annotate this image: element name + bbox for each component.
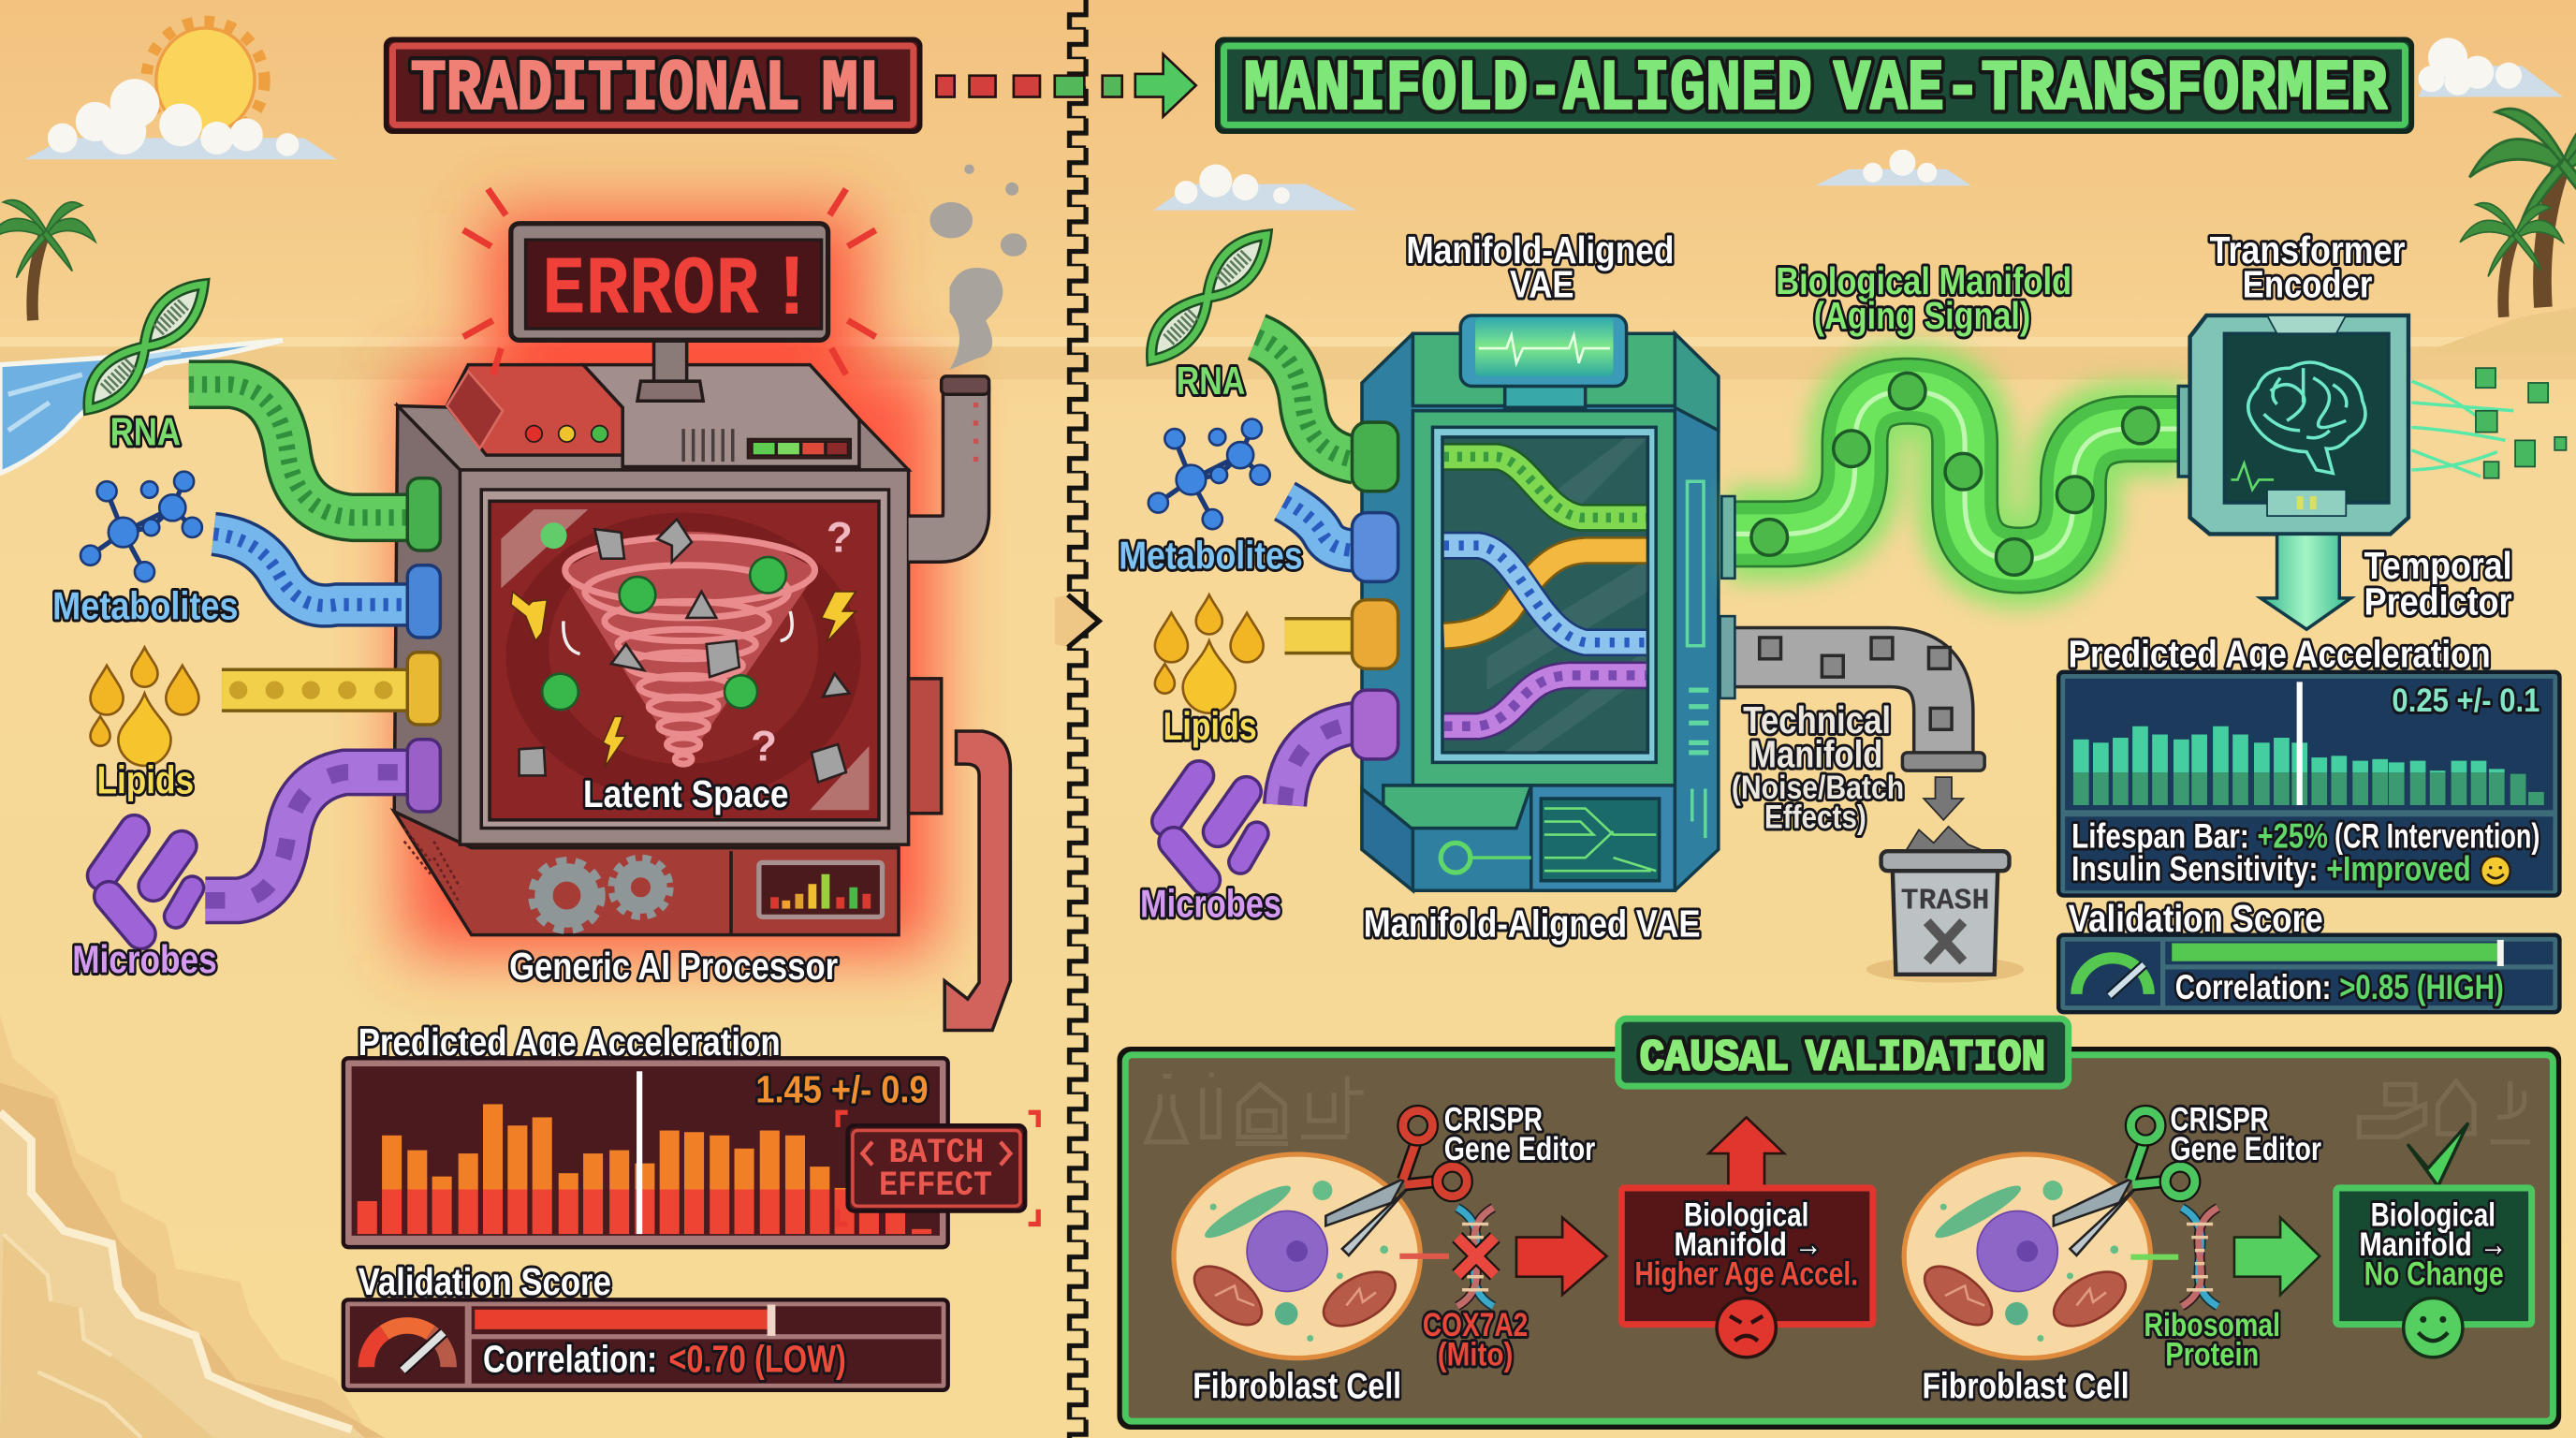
icon: ribosomal gene: [2130, 1208, 2217, 1306]
insulin line: Insulin Sensitivity:: [2071, 850, 2318, 888]
debris rocks: [520, 520, 849, 782]
label: lipids: Lipids: [1164, 704, 1257, 748]
cloud: [1153, 165, 1357, 211]
icon: brain: [2248, 362, 2365, 473]
side vents: [1687, 481, 1708, 838]
callout: batch effect: BATCH: [889, 1134, 984, 1173]
panel: right validation score: [2058, 935, 2559, 1012]
scissors red: [1325, 1110, 1467, 1255]
value: 1.45 +/- 0.9: [755, 1068, 929, 1111]
tube nodes: [1751, 373, 2159, 575]
icon: happy face: [2404, 1299, 2463, 1357]
icon: check: [2408, 1123, 2467, 1186]
top capsule: [1460, 315, 1627, 407]
divider: [1055, 0, 1099, 1438]
arrow: batch effect leak: [944, 731, 1010, 1030]
gears: [534, 859, 668, 929]
exhaust pipe: [909, 376, 989, 539]
label: transformer encoder: Encoder: [2243, 263, 2373, 306]
icon: metabolites: [80, 472, 202, 581]
faded lab icons right: [2359, 1081, 2530, 1142]
cloud: [2419, 37, 2563, 97]
palm tree: [2460, 203, 2563, 317]
label: biological manifold: [1776, 259, 2071, 337]
label: fibroblast left: Fibroblast Cell: [1193, 1367, 1401, 1407]
title: manifold-aligned VAE-transformer: VAE-TRANSFORMER: [1834, 50, 2388, 131]
icon: sun: [146, 22, 265, 139]
left cell: [1174, 1154, 1420, 1358]
title: manifold-aligned VAE-transformer: [1218, 39, 2411, 131]
bottom side vents: [404, 829, 460, 903]
label: microbes: Microbes: [1140, 881, 1281, 925]
label: CRISPR left: CRISPR: [1444, 1102, 1543, 1138]
icon: lipids: [91, 648, 198, 766]
bars: [2073, 726, 2544, 805]
water: [0, 340, 283, 473]
label: technical manifold: Effects): [1764, 800, 1866, 836]
box: no change: [2336, 1188, 2532, 1325]
pipe: microbes: [1284, 723, 1357, 805]
label: technical manifold: Manifold: [1749, 733, 1882, 776]
icon: microbes: [81, 809, 208, 955]
label: manifold-aligned VAE top: [1406, 228, 1674, 306]
red glow: [402, 213, 936, 953]
label: CRISPR right: [2170, 1102, 2321, 1167]
error sign: !: [778, 240, 806, 331]
label: metabolites: Metabolites: [1119, 533, 1303, 577]
label: biological manifold: (Aging Signal): [1814, 294, 2030, 337]
panel: manifold-aligned VAE machine: [1352, 315, 1719, 890]
arrow: to trash: [1924, 777, 1963, 820]
green orbs: [540, 522, 786, 710]
pipe: microbes: [205, 740, 440, 901]
pipe: metabolites: [213, 534, 440, 638]
gauge: [366, 1326, 448, 1371]
icon: angry face: [1717, 1299, 1776, 1357]
label: latent space: Latent Space: [583, 772, 788, 815]
box: no change: Manifold →: [2359, 1226, 2507, 1263]
callout: batch effect: EFFECT: [879, 1167, 992, 1206]
label: predicted age acceleration (left): Predicted Age Acceleration: [359, 1020, 781, 1064]
label: biological manifold: Biological Manifold: [1776, 259, 2071, 302]
icon: RNA: [89, 285, 204, 409]
label: generic AI processor: Generic AI Processor: [509, 945, 838, 988]
label: COX7A2: (Mito): [1438, 1336, 1513, 1372]
label: CRISPR right: CRISPR: [2170, 1102, 2269, 1138]
palm tree: [0, 200, 95, 320]
question marks: ?: [751, 723, 777, 770]
arrow: transition dashes: [936, 54, 1196, 117]
bars: [358, 1104, 931, 1234]
pipe: RNA: [1257, 337, 1355, 460]
title: traditional ML: TRADITIONAL: [411, 50, 800, 131]
panel: right validation score: >0.85 (HIGH): [2339, 968, 2504, 1006]
heading tab: [1618, 1019, 2069, 1086]
panel: transformer encoder: [2178, 315, 2408, 534]
data particles: [2411, 368, 2566, 478]
label: fibroblast right: Fibroblast Cell: [1922, 1367, 2130, 1407]
window: [1432, 427, 1656, 762]
ribbons: [1444, 457, 1647, 726]
pipe: RNA: [189, 385, 440, 550]
label: metabolites: Metabolites: [52, 584, 238, 628]
label: CRISPR left: [1444, 1102, 1595, 1167]
label: predicted age acceleration (right): Predicted Age Acceleration: [2069, 633, 2491, 676]
icon: trash can: [1866, 827, 2024, 983]
panel: right validation score: Correlation:: [2175, 968, 2331, 1006]
error sign: [511, 224, 828, 401]
gauge: [2076, 958, 2149, 996]
cloud: [1815, 150, 1971, 185]
pipe: lipids: [1284, 625, 1357, 647]
title: manifold-aligned VAE-transformer: MANIFOLD-ALIGNED: [1244, 50, 1812, 131]
panel: left validation score: Correlation:: [483, 1338, 657, 1381]
panel: left bar chart: [344, 1058, 948, 1247]
smoke: [929, 165, 1027, 370]
label: manifold-aligned VAE top: VAE: [1510, 263, 1573, 306]
icon: metabolites: [1149, 419, 1270, 529]
label: microbes: Microbes: [72, 937, 217, 981]
label: manifold-aligned VAE bottom: Manifold-Aligned VAE: [1364, 902, 1701, 945]
arrow: temporal predictor: [2261, 534, 2351, 629]
heading tab: VALIDATION: [1806, 1034, 2045, 1084]
right cell: [1904, 1154, 2150, 1358]
biological manifold tube: [1721, 373, 2185, 579]
pipe: lipids: [222, 653, 440, 725]
label: technical manifold: Technical: [1743, 698, 1891, 741]
error sign: ERROR: [542, 244, 759, 337]
label: ribosomal protein: [2144, 1307, 2280, 1372]
value: 0.25 +/- 0.1: [2392, 682, 2539, 719]
insulin line: [2071, 850, 2510, 888]
faded lab icons left: [1147, 1075, 1364, 1144]
label: validation score (left): Validation Score: [359, 1260, 611, 1303]
box: no change: No Change: [2364, 1255, 2504, 1292]
label: validation score (right): Validation Score: [2069, 897, 2323, 940]
label: transformer encoder: Transformer: [2210, 228, 2406, 271]
box: no change: Biological: [2371, 1196, 2496, 1233]
lightning bolts: [511, 592, 856, 768]
label: temporal predictor: Temporal: [2364, 544, 2512, 587]
lifespan line: +25%: [2258, 817, 2328, 856]
label: technical manifold: (Noise/Batch: [1732, 770, 1904, 806]
panel: generic AI processor machine: [394, 365, 942, 935]
flanges: [1352, 422, 1398, 759]
icon: RNA: [1151, 235, 1266, 360]
lifespan line: [2071, 817, 2539, 856]
technical manifold grey pipe: [1720, 616, 1984, 770]
panel: left validation score: [344, 1299, 948, 1390]
right pipes: [1257, 337, 1357, 805]
label: lipids: Lipids: [97, 758, 194, 802]
tornado: [562, 532, 818, 766]
circuit screen: [1441, 785, 1675, 890]
callout: batch effect: [838, 1112, 1038, 1225]
icon: lipids: [1155, 594, 1264, 713]
error rays: [463, 189, 875, 374]
label: temporal predictor: [2364, 544, 2512, 623]
box: higher age accel: Biological: [1684, 1196, 1808, 1233]
arrow: red up: [1708, 1117, 1784, 1190]
label: manifold-aligned VAE top: Manifold-Aligned: [1406, 228, 1674, 271]
machine LEDs and vents: [526, 426, 851, 462]
latent space screen: [481, 490, 889, 829]
scissors green: [2054, 1110, 2195, 1255]
palm tree: [2469, 109, 2576, 307]
label: temporal predictor: Predictor: [2364, 580, 2512, 623]
question marks: ?: [827, 514, 853, 562]
box: higher age accel: [1621, 1188, 1873, 1325]
title: traditional ML: ML: [822, 50, 896, 131]
arrow: red: [1516, 1218, 1606, 1295]
icon: trash can: TRASH: [1901, 886, 1989, 918]
icon: microbes: [1147, 756, 1272, 901]
label: COX7A2: COX7A2: [1423, 1307, 1528, 1343]
icon: knocked out gene: [1399, 1208, 1495, 1306]
label: ribosomal protein: Ribosomal: [2144, 1307, 2280, 1343]
machine body: [394, 365, 942, 935]
cloud: [24, 79, 337, 159]
insulin line: +Improved: [2326, 850, 2471, 888]
label: CRISPR left: Gene Editor: [1444, 1131, 1595, 1167]
arrow: green: [2234, 1218, 2320, 1295]
left pipes: [189, 385, 440, 901]
label: COX7A2: [1423, 1307, 1528, 1372]
panel: causal validation: [1122, 1019, 2556, 1425]
panel: right bar chart: [2058, 672, 2559, 896]
label: technical manifold: [1732, 698, 1904, 836]
panel: left validation score: <0.70 (LOW): [668, 1338, 846, 1381]
label: RNA: RNA: [1177, 359, 1245, 403]
lifespan line: Lifespan Bar:: [2071, 817, 2249, 856]
label: RNA: RNA: [110, 410, 181, 454]
label: ribosomal protein: Protein: [2165, 1336, 2259, 1372]
label: CRISPR right: Gene Editor: [2170, 1131, 2321, 1167]
label: transformer encoder: [2210, 228, 2406, 306]
question marks: [751, 514, 853, 770]
heading tab: CAUSAL: [1640, 1034, 1789, 1084]
box: higher age accel: Higher Age Accel.: [1634, 1255, 1858, 1292]
mini bar chart: [759, 862, 882, 917]
pipe: metabolites: [1284, 501, 1357, 550]
box: higher age accel: Manifold →: [1674, 1226, 1822, 1263]
